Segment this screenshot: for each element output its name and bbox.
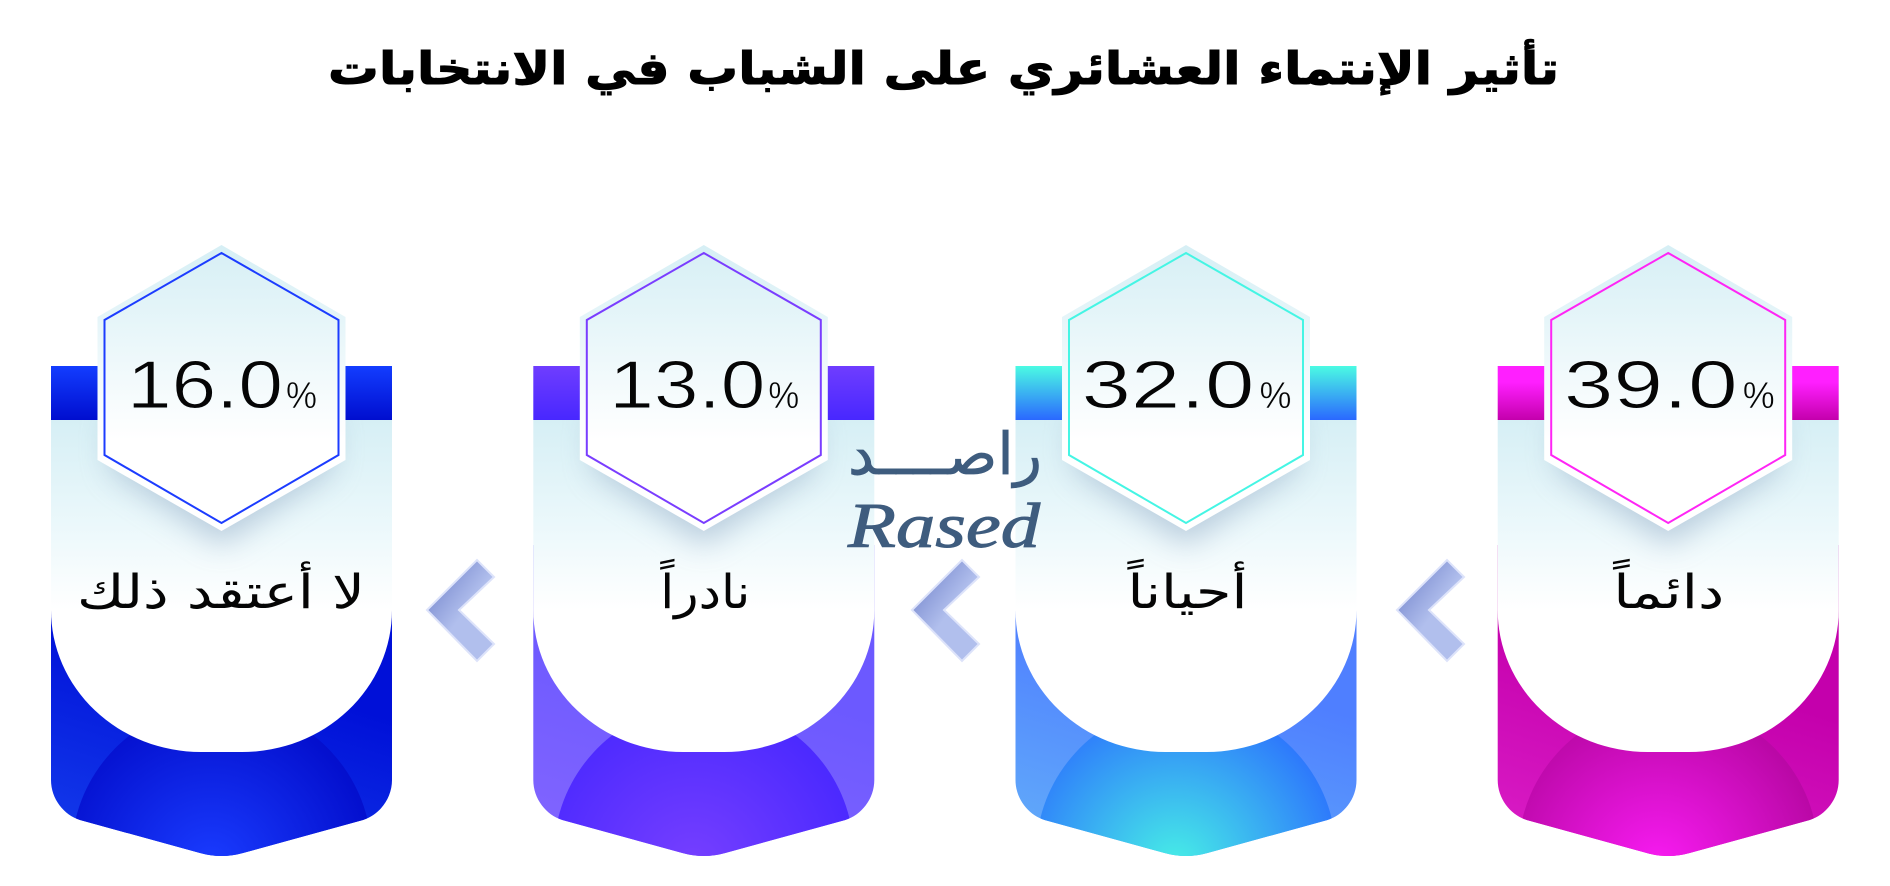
arrow: left chevron between cards 1 and 2 bbox=[427, 560, 494, 661]
value: 39.0 bbox=[1564, 347, 1738, 423]
label: أحياناً bbox=[1127, 559, 1248, 620]
value: % bbox=[1743, 375, 1775, 416]
card arch bbox=[1040, 735, 1332, 856]
panel: card دائماً 39.0% bbox=[1498, 245, 1839, 860]
hexagon bbox=[1544, 245, 1792, 531]
label: لا أعتقد ذلك bbox=[77, 561, 365, 620]
card arch bbox=[558, 735, 850, 856]
value bbox=[609, 347, 799, 423]
value bbox=[1564, 347, 1775, 423]
card arch bbox=[1522, 735, 1814, 856]
logo Arabic wordmark: راصــــد bbox=[848, 420, 1042, 488]
card base bbox=[1016, 545, 1356, 856]
card white panel bbox=[1016, 420, 1356, 752]
top band bbox=[533, 366, 874, 420]
top band bbox=[1498, 366, 1839, 420]
card base bbox=[1498, 545, 1839, 856]
label: نادراً bbox=[660, 559, 750, 620]
arrow: left chevron between cards 2 and 3 bbox=[912, 560, 979, 661]
value: % bbox=[1260, 375, 1292, 416]
title: تأثير الإنتماء العشائري على الشباب في الانتخابات bbox=[328, 39, 1559, 95]
card white panel bbox=[1498, 420, 1839, 752]
hexagon bbox=[1062, 245, 1310, 531]
hexagon bbox=[98, 245, 346, 531]
value: 13.0 bbox=[609, 347, 765, 423]
logo: Rased watermark bbox=[847, 420, 1042, 561]
hexagon shadow bbox=[1064, 461, 1309, 553]
value: 32.0 bbox=[1082, 347, 1254, 423]
card white panel bbox=[533, 420, 874, 752]
panel: card أحياناً 32.0% bbox=[1016, 245, 1356, 860]
top band bbox=[1016, 366, 1356, 420]
panel: card نادراً 13.0% bbox=[533, 245, 874, 860]
value: % bbox=[768, 375, 799, 416]
label: دائماً bbox=[1613, 559, 1724, 620]
arrow: left chevron between cards 3 and 4 bbox=[1397, 560, 1464, 661]
logo Latin wordmark: Rased bbox=[847, 490, 1041, 561]
value: % bbox=[286, 375, 317, 416]
hexagon shadow bbox=[1547, 462, 1790, 554]
hexagon shadow bbox=[582, 462, 825, 554]
hexagon bbox=[580, 245, 828, 531]
value bbox=[127, 347, 317, 423]
panel: card لا أعتقد ذلك 16.0% bbox=[51, 245, 392, 860]
card base bbox=[533, 545, 874, 856]
card base bbox=[51, 545, 392, 856]
card white panel bbox=[51, 420, 392, 752]
value bbox=[1082, 347, 1292, 423]
top band bbox=[51, 366, 392, 420]
hexagon shadow bbox=[100, 462, 343, 554]
card arch bbox=[76, 735, 368, 856]
value: 16.0 bbox=[127, 347, 283, 423]
